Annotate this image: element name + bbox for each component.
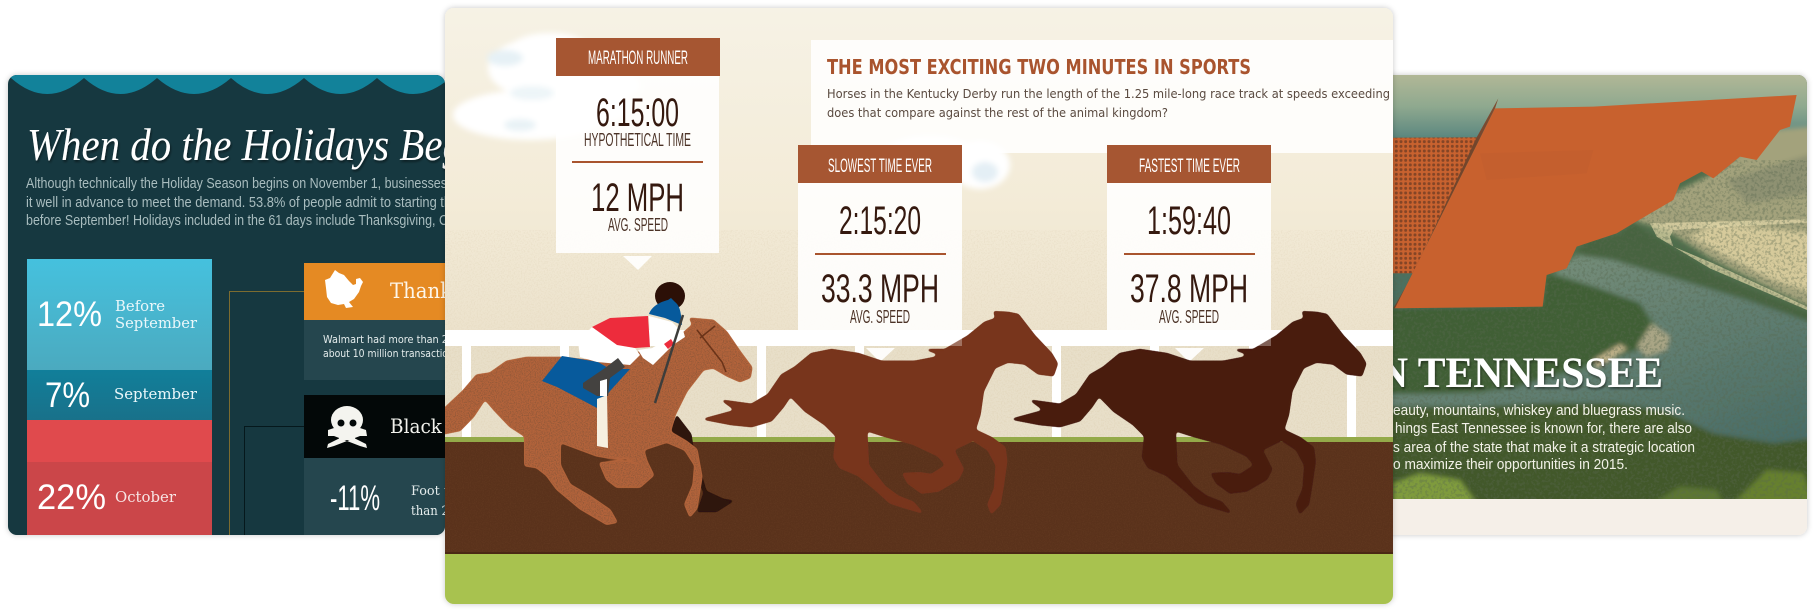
- body text: o maximize their opportunities in 2015.: [1393, 457, 1628, 473]
- intro paragraph: Horses in the Kentucky Derby run the length of the 1.25 mile-long race track at speeds exceeding 3: [827, 86, 1401, 101]
- horse and jockey: [440, 282, 760, 525]
- track and grass: [445, 437, 1393, 604]
- callout: marathon runner: 6:15:00: [596, 91, 679, 135]
- panel: intro text box: [811, 40, 1401, 153]
- intro paragraph: before September! Holidays included in the 61 days include Thanksgiving, C: [26, 213, 448, 229]
- bar: 22% october: 22%: [37, 478, 106, 517]
- panel: thanksgiving: Walmart had more than 2: [323, 333, 448, 346]
- panel: kentucky derby card: [440, 8, 1401, 604]
- callout: marathon runner: [556, 38, 720, 270]
- panel: thanksgiving: Thank: [390, 279, 452, 303]
- body text: [1393, 403, 1695, 473]
- panel: black friday: Black: [390, 414, 443, 438]
- icon: skull and crossbones: [327, 406, 367, 448]
- bar: 22% october: October: [115, 488, 177, 506]
- callout: slowest time ever: [798, 145, 962, 362]
- bar: 22% october: [27, 420, 212, 535]
- landscape photo: [1393, 75, 1807, 499]
- callout: fastest time ever: 1:59:40: [1147, 199, 1231, 243]
- clouds: [453, 33, 1010, 189]
- callout: fastest time ever: AVG. SPEED: [1159, 307, 1219, 327]
- callout: slowest time ever: SLOWEST TIME EVER: [828, 156, 932, 177]
- intro paragraph: [828, 88, 1389, 120]
- panel: thanksgiving: [304, 263, 454, 380]
- callout: marathon runner: HYPOTHETICAL TIME: [584, 130, 691, 150]
- footer strip: [1393, 499, 1807, 510]
- shadow with halftone: [1393, 95, 1797, 308]
- panel: black friday: Foot t: [411, 484, 450, 499]
- bar: 7% september: September: [114, 385, 198, 403]
- callout: fastest time ever: [1107, 145, 1271, 362]
- scalloped top border: [8, 75, 460, 94]
- heading: most exciting two minutes: THE MOST EXCITING TWO MINUTES IN SPORTS: [827, 55, 1251, 79]
- bar: 12% before september: September: [115, 314, 198, 332]
- bar: 12% before september: Before: [115, 297, 165, 315]
- body text: s area of the state that make it a strategic location: [1393, 440, 1695, 456]
- intro paragraph: does that compare against the rest of the animal kingdom?: [827, 105, 1168, 120]
- callout: marathon runner: MARATHON RUNNER: [588, 48, 688, 69]
- bar: 12% before september: 12%: [37, 295, 102, 334]
- body text: hings East Tennessee is known for, there are also: [1395, 421, 1692, 437]
- intro paragraph: Although technically the Holiday Season begins on November 1, businesses: [26, 176, 447, 192]
- map: tennessee state shape: [1395, 95, 1797, 308]
- bar: 12% before september: [27, 259, 212, 370]
- jockey: [542, 282, 685, 448]
- fence: [445, 330, 1393, 442]
- heading: when do the holidays begin: When do the Holidays Beg: [27, 119, 463, 170]
- panel: holidays card: [8, 75, 463, 535]
- body text: eauty, mountains, whiskey and bluegrass music.: [1393, 403, 1685, 419]
- callout: marathon runner: AVG. SPEED: [608, 215, 668, 235]
- callout: slowest time ever: 2:15:20: [839, 199, 921, 243]
- callout: marathon runner: 12 MPH: [591, 176, 684, 220]
- icon: turkey: [325, 270, 363, 308]
- intro paragraph: it well in advance to meet the demand. 53.8% of people admit to starting th: [26, 195, 451, 211]
- panel: black friday: than 2: [411, 504, 449, 519]
- heading: east tennessee: N TENNESSEE: [1378, 350, 1663, 397]
- bar: 7% september: 7%: [45, 376, 90, 415]
- panel: black friday: -11%: [330, 479, 380, 518]
- horse: slowest silhouette: [705, 312, 1057, 513]
- horse: fastest silhouette: [1013, 312, 1366, 513]
- panel: thanksgiving: about 10 million transactio: [323, 347, 448, 360]
- panel: black friday: [304, 395, 454, 535]
- callout: slowest time ever: AVG. SPEED: [850, 307, 910, 327]
- callout: fastest time ever: FASTEST TIME EVER: [1139, 156, 1240, 177]
- bar: 7% september: [27, 370, 212, 420]
- callout: slowest time ever: 33.3 MPH: [821, 267, 939, 311]
- callout: fastest time ever: 37.8 MPH: [1130, 267, 1248, 311]
- intro paragraph: [26, 176, 451, 229]
- panel: east tennessee card: [1393, 72, 1810, 538]
